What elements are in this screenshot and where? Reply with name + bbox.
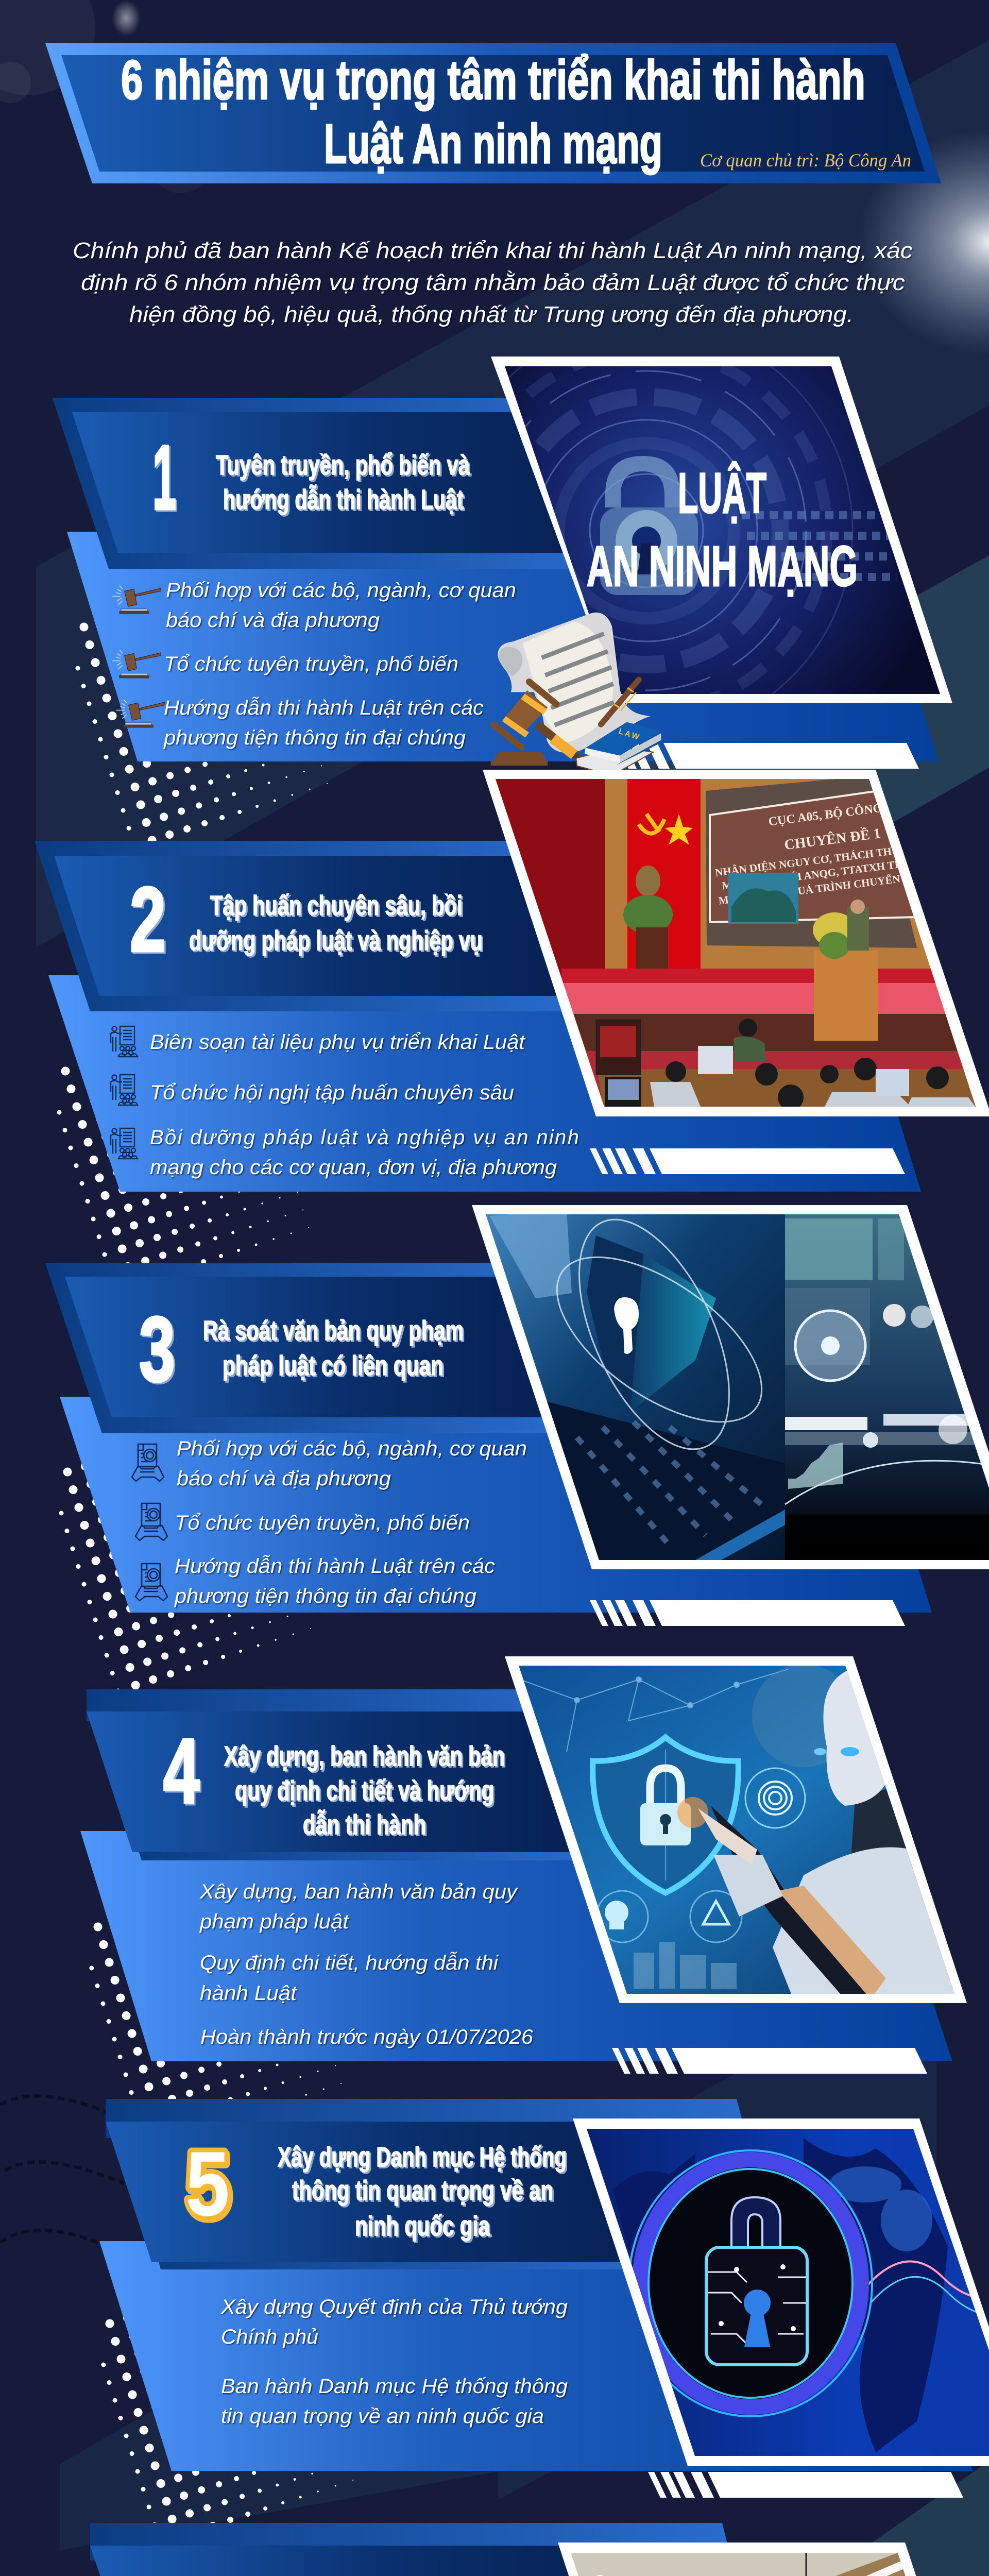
icon: document search: [135, 1564, 167, 1601]
list 5: Chính phủ: [221, 2326, 318, 2348]
intro text: Chính phủ đã ban hành Kế hoạch triển khai thi hành Luật An ninh mạng, xác: [73, 238, 913, 263]
section 6: [84, 2523, 989, 2576]
list 4: [199, 1880, 534, 2048]
icon: training: [111, 1128, 138, 1159]
list 1: Tổ chức tuyên truyền, phố biến: [164, 653, 458, 675]
halftone dots: section 2: [59, 1014, 314, 1308]
number 3: 3: [139, 1298, 175, 1400]
list 3: [174, 1437, 527, 1607]
list 5: Ban hành Danh mục Hệ thống thông: [221, 2375, 568, 2398]
panel: body 1: [67, 532, 939, 761]
list 1: Phối hợp với các bộ, ngành, cơ quan: [166, 579, 516, 602]
heading 2: dưỡng pháp luật và nghiệp vụ: [189, 925, 483, 956]
section 3: [45, 1197, 989, 1626]
illustration: scroll, gavel, law books: [491, 613, 661, 775]
photo: cyber lock: [491, 357, 952, 703]
icon: document search: [132, 1444, 164, 1481]
panel: header 5: [106, 2099, 747, 2269]
heading 5: [278, 2142, 567, 2242]
section 1: 1: [152, 426, 176, 529]
photo: conference hall: MẠNG ĐỐI VỚI ANQG, TTATXH TRONG T: [721, 854, 937, 892]
list 1: Hướng dẫn thi hành Luật trên các: [164, 696, 484, 719]
list 1: [163, 579, 516, 749]
light glow: [868, 138, 989, 346]
icon: gavel: [113, 650, 161, 678]
heading 3: Rà soát văn bản quy phạm: [203, 1315, 464, 1346]
list 4: Hoàn thành trước ngày 01/07/2026: [200, 2026, 534, 2048]
halftone dots: section 1: [78, 570, 333, 863]
panel: header 4: [87, 1689, 618, 1860]
halftone dots: section 4: [92, 1870, 347, 2163]
list 5: [220, 2296, 568, 2428]
list 2: [150, 1031, 579, 1179]
photo: conference hall: CHUYÊN ĐỀ 1: [783, 825, 882, 853]
stripe bar 1: [604, 743, 919, 769]
list 3: Tổ chức tuyên truyền, phố biến: [175, 1512, 470, 1534]
list 2: Bồi dưỡng pháp luật và nghiệp vụ an ninh: [150, 1126, 579, 1149]
stripe bar 5: [648, 2472, 963, 2498]
heading 5: thông tin quan trọng về an: [292, 2175, 553, 2206]
icon: training: [111, 1075, 138, 1105]
panel: header 3: [45, 1263, 577, 1433]
section 5: [99, 2099, 989, 2498]
photo: conference hall: CỤC A05, BỘ CÔNG AN: [768, 799, 903, 829]
heading 1: [216, 450, 470, 515]
panel: body 5: [99, 2241, 973, 2471]
stripe bar 2: [590, 1148, 905, 1174]
intro text: [73, 238, 913, 327]
heading 4: Xây dựng, ban hành văn bản: [224, 1741, 505, 1772]
icon: training: [111, 1026, 138, 1057]
list 3: phương tiện thông tin đại chúng: [174, 1585, 476, 1607]
title banner: [45, 43, 941, 183]
heading 2: Tập huấn chuyên sâu, bồi: [210, 890, 463, 921]
title: Luật An ninh mạng: [324, 112, 662, 175]
heading 2: [189, 890, 483, 956]
dashed arcs: [0, 2096, 124, 2576]
list 1: phương tiện thông tin đại chúng: [163, 726, 466, 749]
list 1: báo chí và địa phương: [166, 609, 380, 632]
panel: body 3: [60, 1397, 932, 1613]
list 2: Biên soạn tài liệu phụ vụ triển khai Luật: [150, 1031, 526, 1054]
title: [121, 48, 865, 175]
panel: header 1: [53, 398, 618, 569]
list 3: Hướng dẫn thi hành Luật trên các: [175, 1554, 495, 1578]
section 4: [80, 1656, 967, 2074]
photo: monitoring centre: [558, 2538, 989, 2576]
heading 1: Tuyên truyền, phổ biến và: [216, 450, 470, 481]
lead agency: Cơ quan chủ trì: Bộ Công An: [700, 150, 911, 171]
list 2: Tổ chức hội nghị tập huấn chuyên sâu: [150, 1081, 514, 1104]
list 5: tin quan trọng về an ninh quốc gia: [221, 2405, 544, 2428]
section 1: [53, 325, 958, 775]
heading 3: pháp luật có liên quan: [223, 1350, 444, 1381]
list 3: báo chí và địa phương: [177, 1467, 391, 1490]
number 5: 5: [185, 2132, 230, 2235]
number 2: 2: [130, 868, 166, 971]
icon: gavel: [117, 700, 165, 727]
photo: conference hall: [483, 770, 989, 1116]
list 4: Xây dựng, ban hành văn bản quy: [199, 1880, 519, 1903]
stripe bar 4: [612, 2048, 927, 2074]
heading 5: ninh quốc gia: [355, 2211, 490, 2242]
stripe bar 3: [590, 1600, 905, 1626]
photo: digital padlock: [573, 2119, 989, 2466]
number 4: 4: [163, 1720, 199, 1822]
heading 4: [224, 1741, 505, 1840]
photo label: LUẬT: [678, 462, 766, 525]
icon: document search: [135, 1503, 167, 1540]
heading 1: hướng dẫn thi hành Luật: [223, 484, 464, 515]
heading 5: Xây dựng Danh mục Hệ thống: [278, 2142, 567, 2173]
panel: body 2: [48, 975, 921, 1192]
list 2: mạng cho các cơ quan, đơn vị, địa phương: [150, 1156, 557, 1179]
photo: conference hall: NHẬN DIỆN NGUY CƠ, THÁCH THỨC TỪ: [714, 841, 927, 879]
halftone dots: section 5: [104, 2267, 359, 2560]
photo: digital shield: [472, 1197, 989, 1569]
list 5: Xây dựng Quyết định của Thủ tướng: [220, 2296, 568, 2318]
list 4: hành Luật: [200, 1982, 298, 2005]
list 3: Phối hợp với các bộ, ngành, cơ quan: [177, 1437, 527, 1460]
photo: robot and shield: [505, 1656, 967, 2003]
list 4: Quy định chi tiết, hướng dẫn thi: [200, 1951, 499, 1974]
section 2: [35, 770, 989, 1192]
panel: header 6: [90, 2523, 731, 2576]
heading 4: dẫn thi hành: [303, 1809, 426, 1840]
photo label: [587, 462, 858, 598]
photo: conference hall: MẠNG 4.0 VÀ QUÁ TRÌNH CHUYỂN ĐỔI SỐ: [718, 868, 941, 907]
halftone dots: section 3: [61, 1415, 316, 1708]
heading 4: quy định chi tiết và hướng: [235, 1775, 494, 1806]
list 4: phạm pháp luật: [199, 1910, 350, 1933]
panel: body 4: [80, 1831, 952, 2061]
intro text: hiện đồng bộ, hiệu quả, thống nhất từ Trung ương đến địa phương.: [129, 302, 854, 327]
icon: gavel: [113, 586, 161, 614]
illustration: scroll, gavel, law books: LAW: [618, 727, 642, 742]
heading 3: [203, 1315, 464, 1381]
panel: header 2: [35, 841, 592, 1011]
intro text: định rõ 6 nhóm nhiệm vụ trọng tâm nhằm bảo đảm Luật được tổ chức thực: [81, 270, 905, 295]
